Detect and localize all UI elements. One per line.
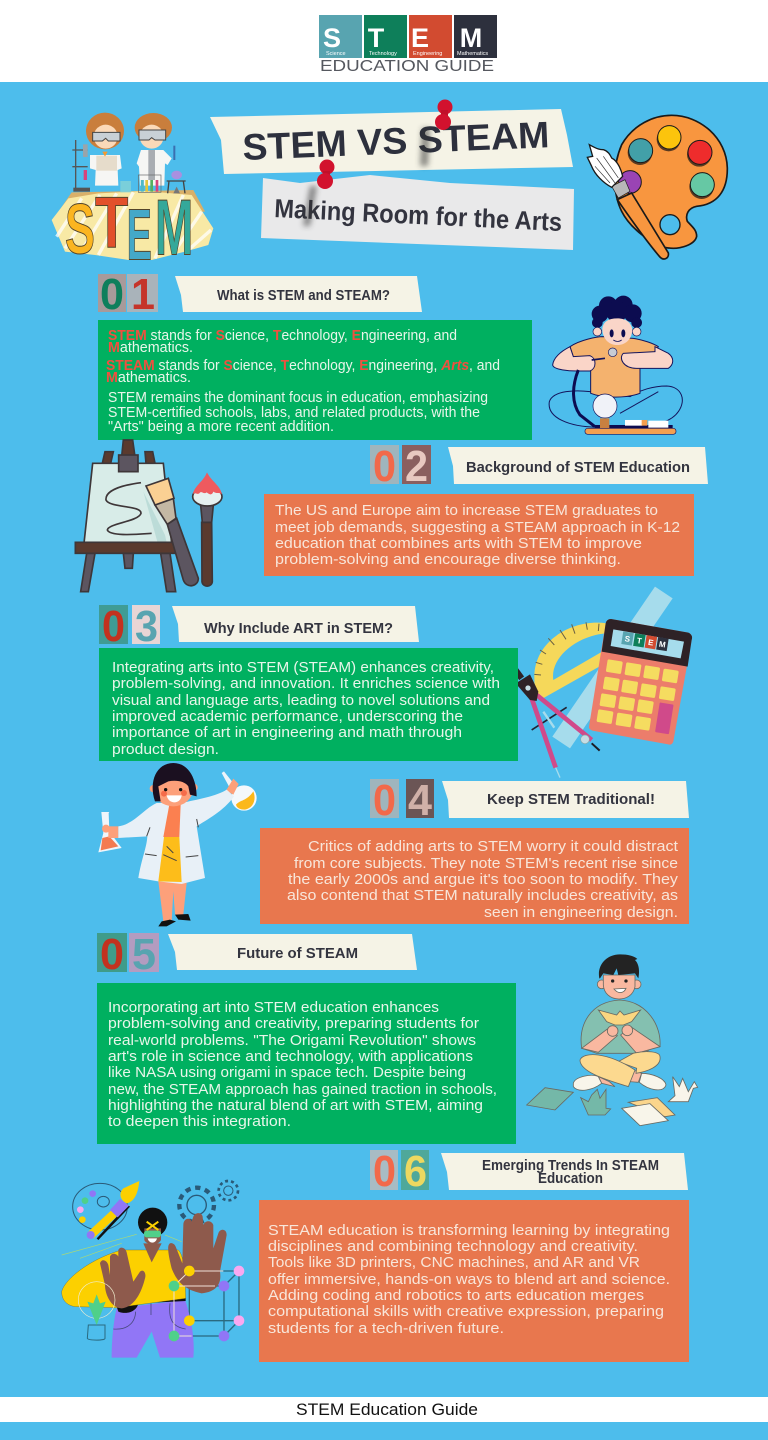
STEM letters [65,183,193,275]
text box 03: importance of art in engineering and math through [112,724,462,741]
text box 04: seen in engineering design. [484,904,678,921]
text box 06 [259,1200,689,1362]
heading 06: Emerging Trends In STEAM [482,1157,659,1174]
text box 05: to deepen this integration. [108,1113,291,1130]
text box 05: real-world problems. "The Origami Revolution" shows [108,1032,476,1049]
number 02 [370,442,431,491]
text box 01: Mathematics. [106,369,191,386]
text box 06: disciplines and combining technology and creativity. [268,1238,638,1255]
number 01: 0 [100,270,124,319]
text box 05: problem-solving and creativity, preparing students for [108,1015,479,1032]
STEM letters: T [95,184,128,264]
text box 03 [99,648,518,761]
title: STEM VS STEAM on tape [210,109,573,174]
logo: STEM Education Guide: S [323,23,341,53]
girl [86,113,124,149]
text box 05: like NASA using origami in space tech. Despite being [108,1064,466,1081]
heading 05 [168,934,417,970]
logo: STEM Education Guide: M [460,23,482,53]
text box 01: STEAM stands for Science, Technology, Engineering, Arts, and [106,357,500,374]
header band with logo [0,0,768,82]
text box 02: The US and Europe aim to increase STEM graduates to [275,502,658,519]
heading 05: Future of STEAM [237,945,358,962]
panel 02: Background of STEM Education [264,442,708,576]
text box 01: STEM-certified schools, labs, and related products, with the [108,404,480,421]
logo: STEM Education Guide: EDUCATION GUIDE [320,58,494,75]
footer band [0,1397,768,1422]
panel 04: Keep STEM Traditional [260,776,689,924]
text box 04: also contend that STEM naturally includes creativity, as [287,887,678,904]
heading 01: What is STEM and STEAM? [217,287,390,304]
number 03: 0 [102,602,125,651]
illustration: calculator, protractor, ruler and compass: E [647,638,655,648]
number 03 [99,602,160,651]
number 05: 5 [132,930,156,979]
number 06: 6 [404,1147,427,1196]
illustration: smiling girl scientist with flasks [98,763,257,926]
number 06 [370,1147,429,1196]
subtitle: Making Room for the Arts on tape: Making Room for the Arts [274,193,563,237]
heading 03 [172,606,419,642]
text box 01: "Arts" being a more recent addition. [108,418,334,435]
heading 02: Background of STEM Education [466,459,690,476]
number 02: 0 [373,442,396,491]
title: STEM VS STEAM on tape: STEM VS STEAM [242,114,550,168]
text box 03: product design. [112,741,219,758]
illustration: calculator, protractor, ruler and compass: S [624,634,631,644]
text box 03: Integrating arts into STEM (STEAM) enhances creativity, [112,659,494,676]
text box 01: STEM remains the dominant focus in education, emphasizing [108,389,488,406]
text box 02: education that combines arts with STEM to improve [275,535,642,552]
panel 03: Why Include ART in STEM [99,602,518,761]
footer band: STEM Education Guide [296,1400,478,1419]
heading 03: Why Include ART in STEM? [204,620,393,637]
illustration: artist palette and brush [587,115,727,259]
heading 01 [175,276,422,312]
red pin on title [420,100,452,166]
illustration: boy folding origami [527,954,698,1126]
panel 05: Future of STEAM [97,930,516,1144]
logo: STEM Education Guide [319,15,497,75]
STEM letters: S [65,190,95,270]
heading 04 [442,781,689,818]
panel 01: What is STEM and STEAM [98,270,532,440]
heading 06 [441,1153,688,1190]
logo: STEM Education Guide: Technology [369,51,397,57]
STEM letters: M [155,183,193,271]
panel 06: Emerging Trends In STEAM Education [259,1147,689,1362]
illustration: person with VR goggles, palette, gears and cube [62,1181,244,1358]
text box 02 [264,494,694,576]
number 04: 0 [373,776,396,825]
text box 01 [98,320,532,440]
number 06: 0 [373,1147,396,1196]
logo: STEM Education Guide: Mathematics [457,51,488,57]
number 04: 4 [408,776,433,825]
text box 06: offer immersive, hands-on ways to blend art and science. [268,1271,670,1288]
text box 02: meet job demands, suggesting a STEAM approach in K-12 [275,519,680,536]
text box 03: visual and language arts, leading to novel solutions and [112,692,490,709]
illustration: calculator, protractor, ruler and compass [514,587,692,778]
text box 04: from core subjects. They note STEM's recent rise since [294,855,678,872]
logo: STEM Education Guide: Science [326,51,346,57]
number 01: 1 [131,270,155,319]
number 03: 3 [135,602,158,651]
logo: STEM Education Guide: E [411,23,429,53]
subtitle: Making Room for the Arts on tape [261,175,574,250]
illustration: calculator, protractor, ruler and compass: T [636,636,643,646]
text box 04: Critics of adding arts to STEM worry it could distract [308,838,679,855]
text box 03: problem-solving, and innovation. It enriches science with [112,675,500,692]
STEM letters: E [127,195,152,275]
number 01 [98,270,158,319]
boy [135,113,172,142]
heading 02 [448,447,708,484]
text box 06: computational skills with creative expression, preparing [268,1303,664,1320]
text box 04: the early 2000s and argue it's too soon to modify. They [288,871,679,888]
heading 04: Keep STEM Traditional! [487,791,655,808]
text box 05: highlighting the natural blend of art with STEM, aiming [108,1097,483,1114]
text box 05 [97,983,516,1144]
number 04 [370,776,434,825]
illustration: easel with brushes [75,440,222,592]
heading 06: Education [538,1170,603,1187]
logo: STEM Education Guide: Engineering [413,51,442,57]
text box 05: new, the STEAM approach has gained traction in schools, [108,1081,497,1098]
text box 06: Tools like 3D printers, CNC machines, and AR and VR [268,1254,640,1271]
number 05 [97,930,159,979]
number 02: 2 [405,442,428,491]
text box 05: Incorporating art into STEM education enhances [108,999,439,1016]
text box 04 [260,828,689,924]
text box 01: STEM stands for Science, Technology, Engineering, and [108,327,457,344]
logo: STEM Education Guide: T [368,23,385,53]
illustration: calculator, protractor, ruler and compass: M [658,640,667,650]
number 05: 0 [100,930,124,979]
text box 01: Mathematics. [108,339,193,356]
text box 02: problem-solving and encourage diverse thinking. [275,551,621,568]
illustration: boy building a lamp circuit [549,296,682,434]
illustration: STEM kids at lab table [52,113,213,275]
text box 05: art's role in science and technology, with applications [108,1048,473,1065]
text box 03: improved academic performance, underscoring the [112,708,463,725]
red pin on subtitle [303,160,334,226]
text box 06: STEAM education is transforming learning by integrating [268,1222,670,1239]
text box 06: students for a tech-driven future. [268,1320,504,1337]
text box 06: Adding coding and robotics to arts education merges [268,1287,644,1304]
